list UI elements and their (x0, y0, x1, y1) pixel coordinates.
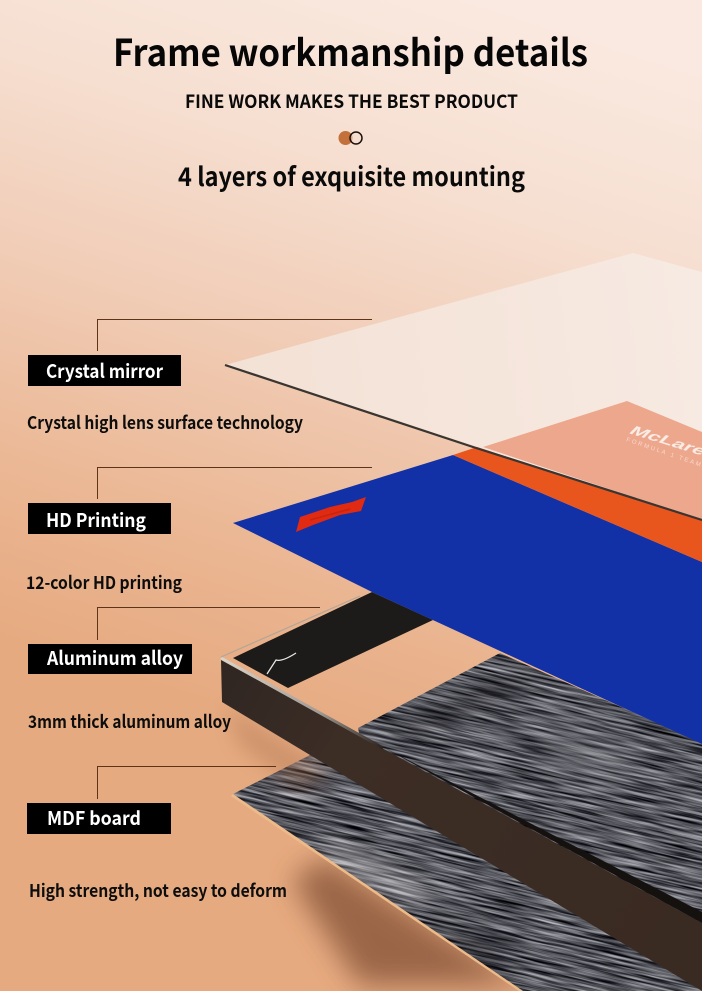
layer: aluminum frame (221, 592, 702, 991)
frame top strip along long side (383, 747, 702, 923)
tag (27, 803, 171, 834)
crack highlight (267, 653, 296, 674)
leader line (98, 320, 372, 351)
label group: HD Printing (26, 468, 372, 595)
tag: Aluminum alloy (46, 644, 183, 671)
upper board wood (358, 653, 702, 945)
description: Crystal high lens surface technology (27, 410, 303, 435)
shadow under board (292, 858, 526, 985)
leader line (98, 608, 320, 640)
print logo mark (296, 497, 366, 532)
description: High strength, not easy to deform (29, 878, 287, 903)
icon: overlapping dots (338, 131, 362, 145)
frame silver trim (221, 658, 383, 748)
tag: Crystal mirror (46, 357, 164, 384)
subtitle: FINE WORK MAKES THE BEST PRODUCT (185, 88, 518, 114)
label group: Aluminum alloy (28, 608, 320, 734)
mirror plate base (225, 253, 702, 520)
section heading: 4 layers of exquisite mounting (178, 157, 525, 194)
lower board wood (233, 750, 702, 991)
leader line (98, 766, 276, 799)
tag: MDF board (47, 804, 141, 831)
label group: MDF board (27, 766, 287, 903)
title: Frame workmanship details (113, 23, 588, 77)
description: 12-color HD printing (26, 570, 182, 595)
tag (28, 503, 171, 534)
layer: HD print (225, 253, 702, 744)
label group: Crystal mirror (27, 320, 372, 435)
description: 3mm thick aluminum alloy (28, 709, 231, 734)
mirror front edge (225, 365, 702, 520)
board edge highlight (231, 794, 525, 991)
layer: MDF board (231, 653, 702, 991)
tag: HD Printing (46, 506, 147, 533)
frame inner back corner (233, 592, 433, 688)
shadow under frame (225, 705, 330, 790)
print blue area (233, 455, 702, 744)
leader line (98, 468, 372, 499)
brand text: FORMULA 1 TEAM (625, 437, 702, 469)
print orange band (453, 447, 702, 562)
frame side face (221, 660, 702, 991)
print pink corner (483, 401, 702, 520)
